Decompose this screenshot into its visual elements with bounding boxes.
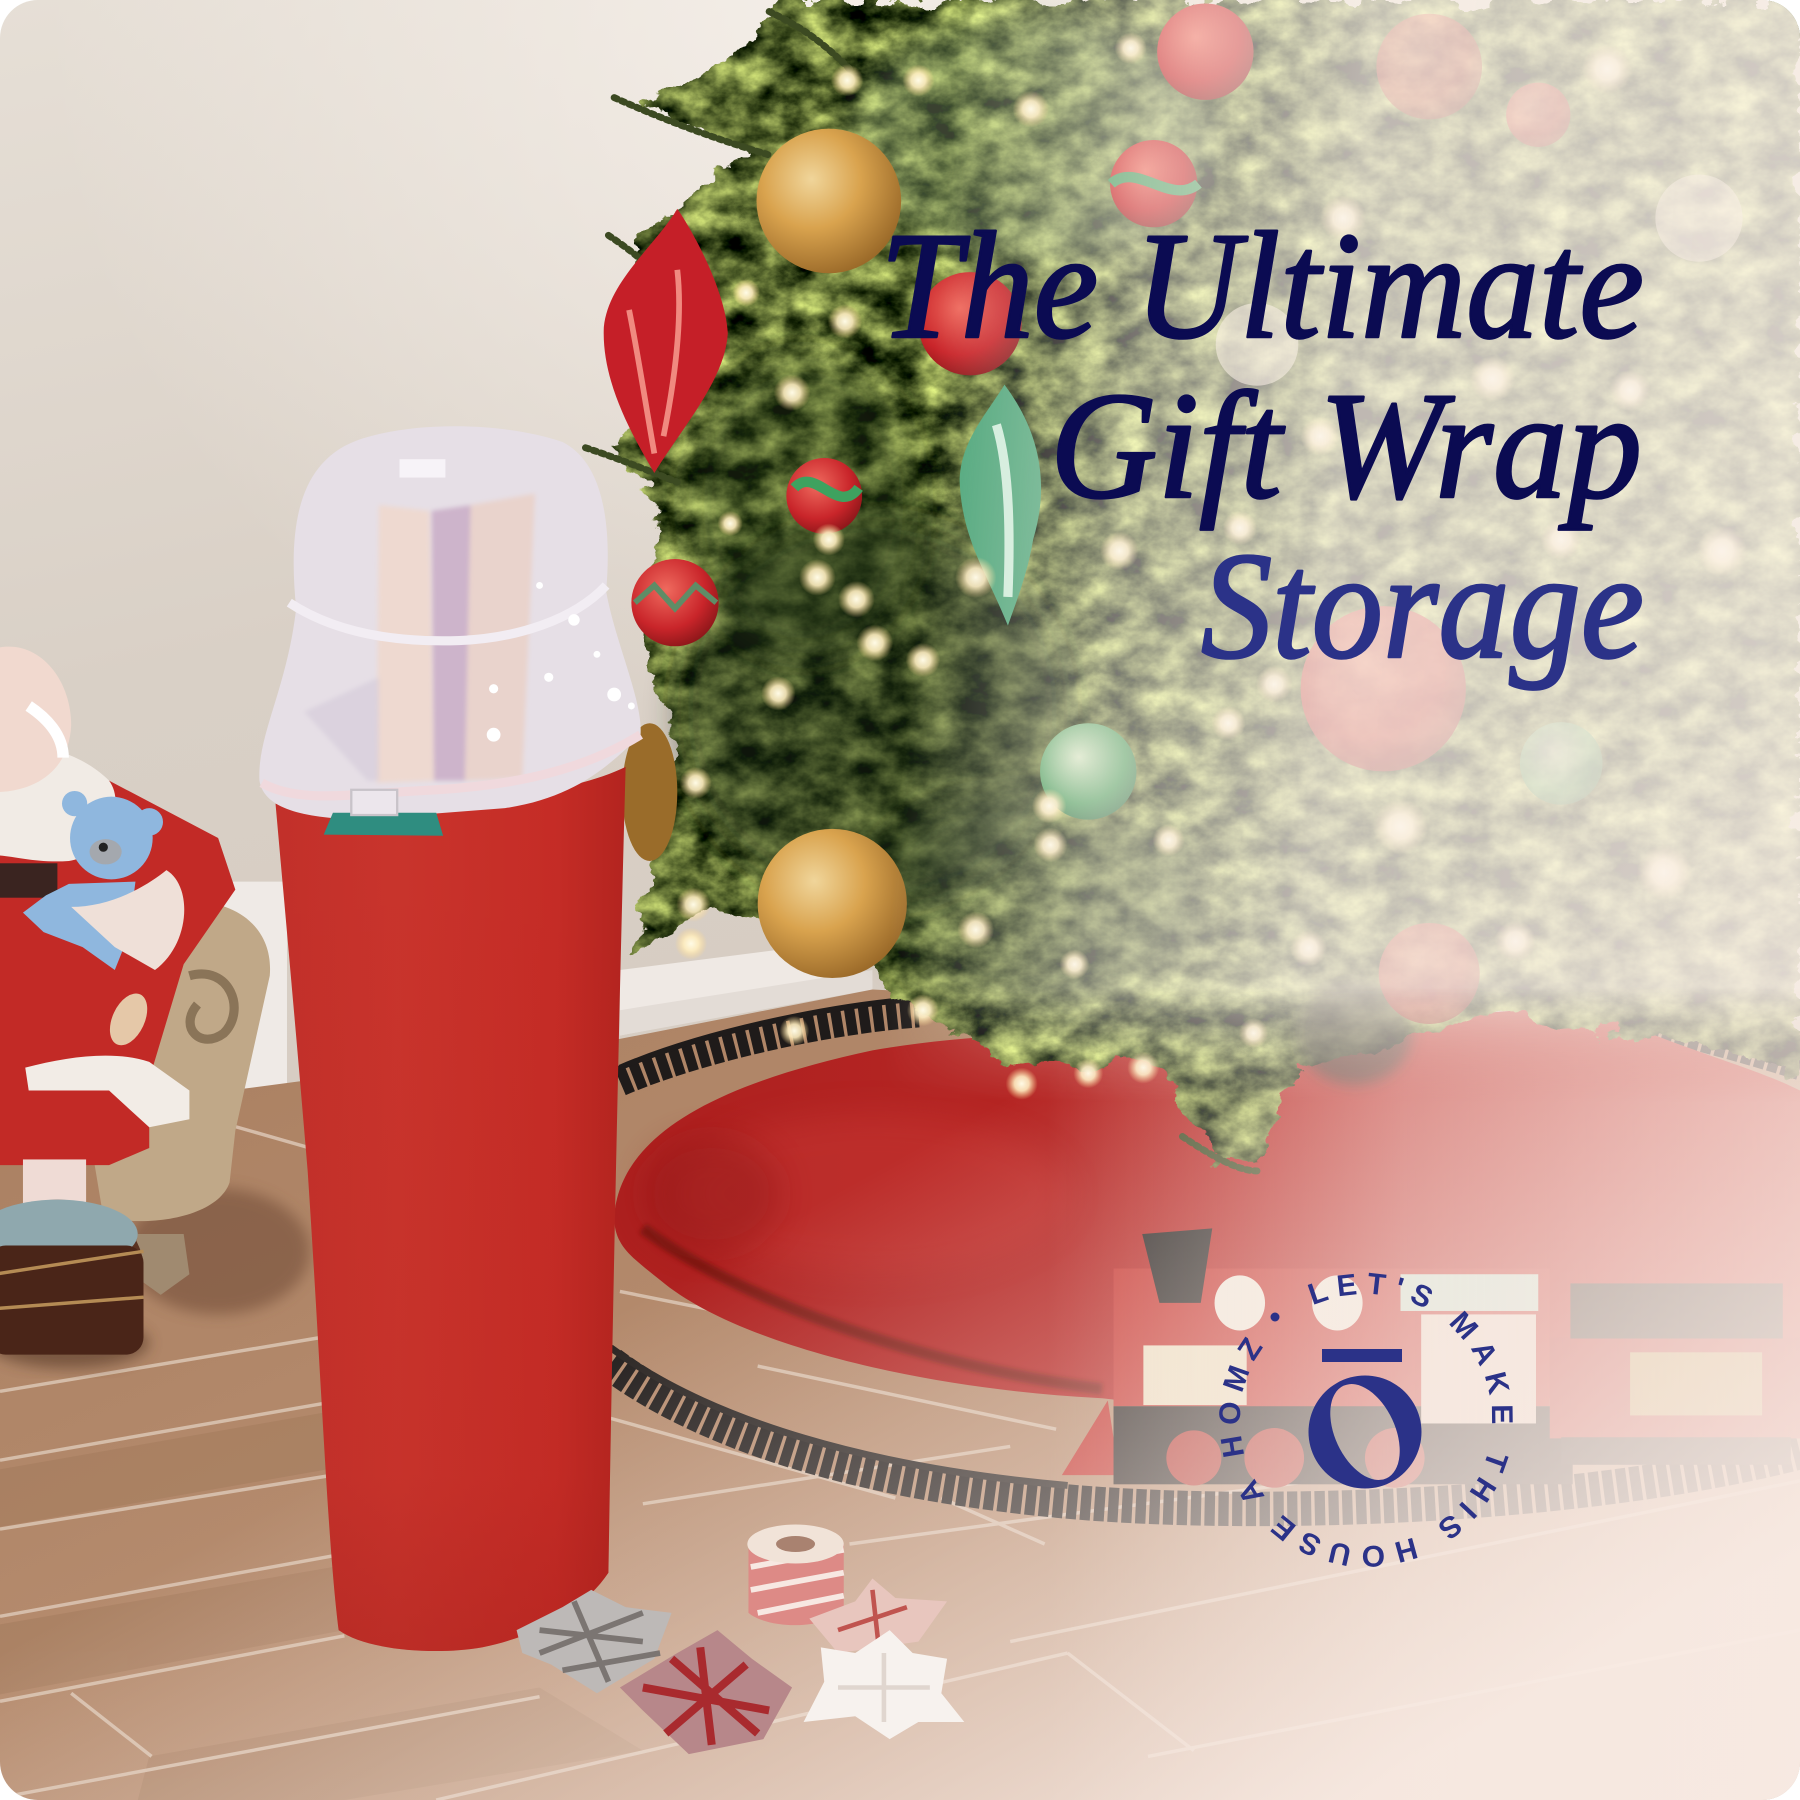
upper train track [620, 999, 1800, 1081]
teddy bear [23, 791, 163, 970]
silver bow [517, 1590, 672, 1693]
ornament: gold ball top [757, 129, 901, 273]
red silver bow [620, 1630, 792, 1754]
gift bows [517, 1578, 964, 1754]
ornament: red teardrop [604, 209, 728, 473]
ornament: gold ball bottom [758, 829, 907, 978]
baseboard [218, 882, 872, 1096]
badge ring text: LET'S MAKE THIS HOUSE A HOMZ [1219, 1272, 1513, 1567]
title line: Gift Wrap: Gift Wrap [1050, 362, 1642, 531]
wall [0, 0, 1800, 1148]
box clasp [324, 813, 443, 836]
box lid [259, 426, 641, 820]
lower train track [611, 1348, 1800, 1509]
toy train [1062, 1228, 1800, 1488]
title line: The Ultimate: The Ultimate [880, 202, 1644, 371]
badge dot [1270, 1312, 1280, 1322]
gift wrap storage box [259, 426, 641, 1651]
pink star bow [809, 1578, 947, 1653]
logo bar [1322, 1349, 1402, 1362]
badge: let's make this house a homz [1219, 1272, 1513, 1567]
ornaments: other baubles [622, 3, 1743, 1024]
santa figurine [0, 647, 310, 1368]
tree skirt [614, 1004, 1800, 1408]
wood floor [0, 990, 1800, 1800]
ribbon spool [747, 1524, 844, 1625]
white star bow [804, 1630, 964, 1739]
box body [276, 767, 626, 1651]
logo ring [1308, 1376, 1421, 1489]
string lights [675, 32, 1747, 1100]
christmas tree [585, 0, 1800, 1171]
title [880, 202, 1644, 691]
title line: Storage: Storage [1201, 522, 1644, 691]
